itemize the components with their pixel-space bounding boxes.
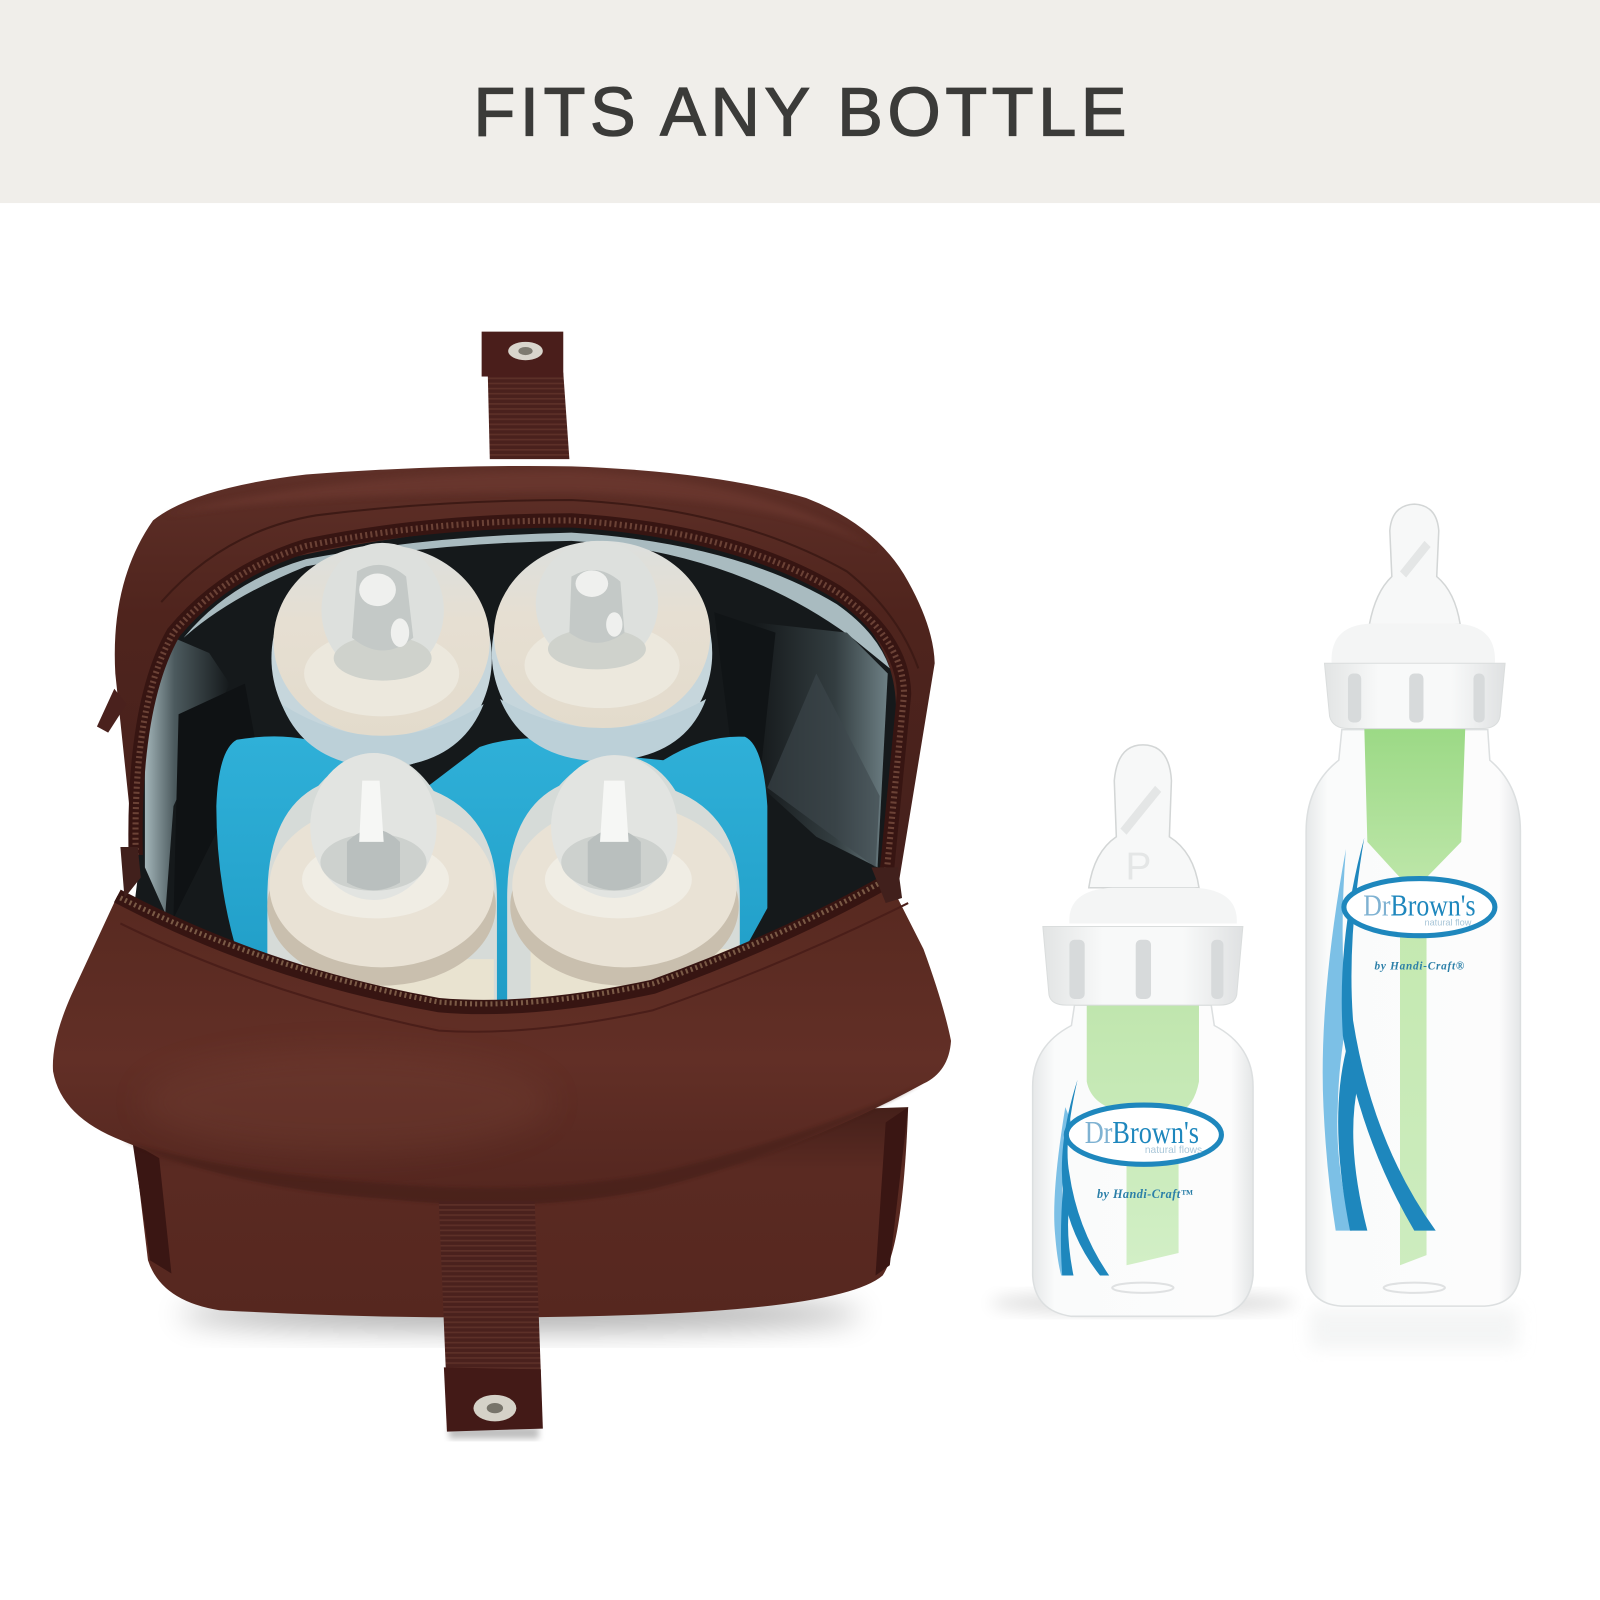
header band [0, 0, 1600, 203]
small bottle logo: DrBrown's [1085, 1115, 1199, 1150]
right lining crease [767, 673, 880, 867]
upper zipper teeth [136, 520, 904, 883]
stitching [120, 903, 908, 1032]
small bottle logo: natural flows [1145, 1145, 1202, 1156]
small bottle nipple: P [1126, 846, 1151, 889]
side gusset shadows [133, 1107, 908, 1276]
large bottle cap dome [1332, 623, 1495, 663]
small bottle tagline: by Handi-Craft™ [1097, 1187, 1194, 1201]
insulated bottle bag [53, 332, 951, 1439]
small bottle [990, 745, 1296, 1316]
nipple [551, 755, 678, 898]
small bottle logo [1066, 1105, 1221, 1164]
bottle top right [492, 541, 712, 761]
large bottle logo: DrBrown's [1363, 888, 1476, 922]
large bottle logo [1344, 879, 1495, 936]
large bottle [1306, 504, 1520, 1349]
top strap with snap [482, 332, 569, 459]
lid back panel [115, 466, 935, 888]
small bottle nipple [1089, 745, 1199, 889]
nipple [536, 541, 658, 667]
left lining panel [145, 638, 230, 913]
upper zipper [136, 520, 904, 883]
small bottle green insert [1087, 1005, 1199, 1265]
lid highlight [163, 471, 878, 551]
left pocket detail [173, 684, 265, 918]
tab shadow [449, 1427, 539, 1439]
lower zipper teeth [120, 880, 886, 1004]
left zipper pull [97, 689, 127, 733]
large bottle base ring [1384, 1283, 1445, 1293]
right lining dark pleat [714, 612, 776, 776]
large bottle collar notches [1348, 673, 1485, 722]
small bottle cap dome [1069, 888, 1237, 923]
zipper pulls [120, 847, 902, 903]
right lining panel [755, 622, 888, 867]
small bottle body [1033, 1005, 1253, 1316]
ground shadow [179, 1299, 862, 1330]
ice pack [216, 736, 767, 1005]
silver top lining [184, 533, 890, 668]
large bottle light swoosh [1323, 849, 1352, 1231]
lid stitching [161, 500, 918, 668]
large bottle green insert [1364, 727, 1465, 1265]
large bottle reflection [1310, 1308, 1518, 1349]
lower body of the bag [133, 1107, 908, 1318]
bag interior [133, 526, 896, 1020]
small bottle collar notches [1069, 940, 1223, 999]
small bottle dark swoosh [1061, 1080, 1109, 1276]
bottle bottom right [507, 755, 740, 1010]
large bottle tagline: by Handi-Craft® [1374, 960, 1465, 972]
bottle top left [271, 543, 492, 768]
flap bottom shading [122, 1084, 923, 1205]
lower front flap [53, 883, 951, 1205]
flap highlight [143, 1051, 551, 1153]
small bottle base ring [1112, 1283, 1173, 1293]
lower tab with snap [444, 1367, 543, 1432]
nipple [321, 543, 444, 678]
large bottle nipple [1369, 504, 1460, 624]
lower zipper [117, 880, 890, 1007]
bottle bottom left [267, 753, 497, 1010]
small bottle shadow [990, 1293, 1296, 1313]
large bottle logo: natural flow [1424, 918, 1472, 928]
large bottle dark swoosh [1338, 838, 1436, 1231]
lower strap [439, 1201, 541, 1372]
large bottle body [1306, 730, 1520, 1306]
large bottle collar [1324, 663, 1505, 729]
title: FITS ANY BOTTLE [473, 75, 1127, 151]
small bottle collar [1043, 927, 1243, 1005]
nipple [310, 753, 437, 900]
small bottle light swoosh [1054, 1107, 1073, 1276]
